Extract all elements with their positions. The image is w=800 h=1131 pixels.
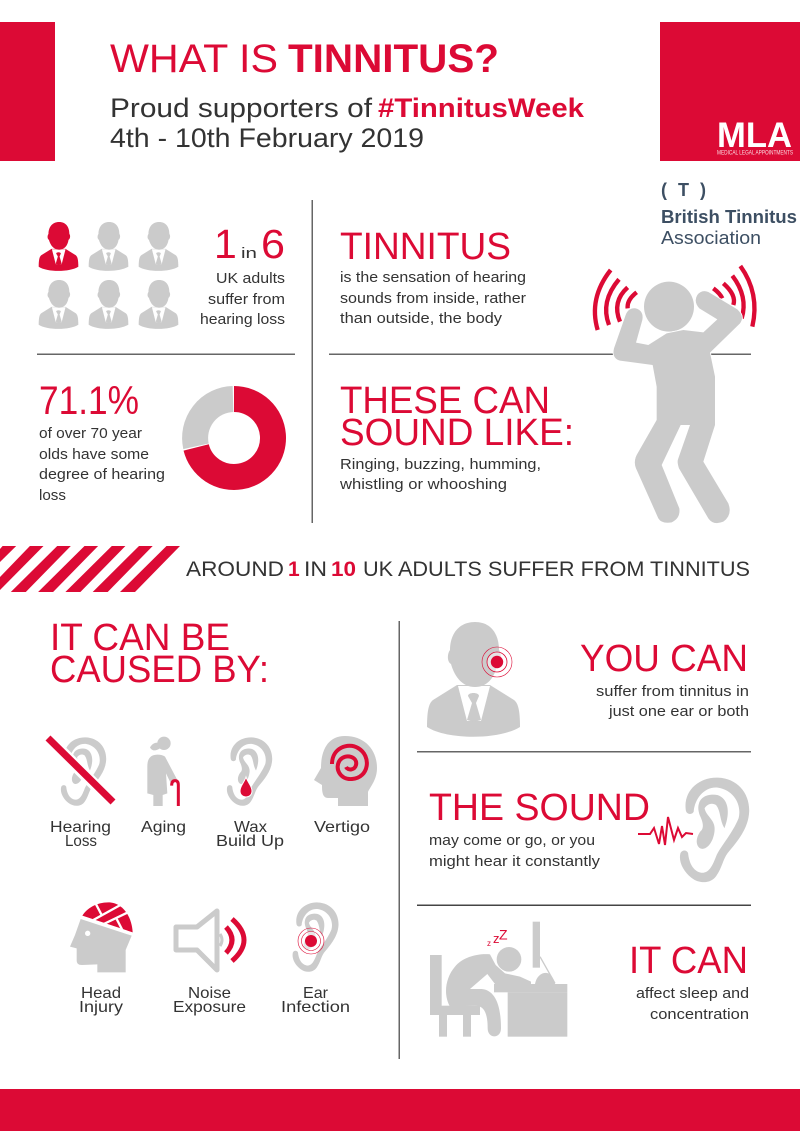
icon: person asleep at desk	[430, 922, 567, 1037]
label: aging: Aging	[141, 819, 186, 836]
header block left	[0, 22, 55, 161]
text: the sound: may come or go, or you	[429, 832, 595, 849]
subtitle: 4th - 10th February 2019	[110, 123, 424, 153]
heading: it can be caused by	[50, 617, 269, 691]
stat: 1 in 6: in	[241, 245, 257, 262]
icon: wax build up	[227, 737, 272, 806]
zzz: z	[493, 931, 500, 946]
stat: 71.1%: degree of hearing	[39, 466, 165, 483]
stat: 1 in 6	[200, 221, 285, 328]
banner text: 10	[331, 558, 356, 581]
icon: six people	[39, 222, 178, 329]
label: hearing loss: Hearing	[50, 819, 111, 836]
text: tinnitus definition: is the sensation of hearing	[340, 269, 526, 286]
text: you can	[596, 683, 749, 720]
header block right with MLA logo: MLA	[717, 116, 792, 155]
label: head injury: Injury	[79, 999, 123, 1016]
icon: hearing loss	[46, 736, 114, 806]
stat: 71.1%	[39, 379, 165, 504]
heading: it can be caused by: IT CAN BE	[50, 617, 230, 659]
banner text: 1	[288, 558, 300, 581]
label: ear infection: Ear	[303, 985, 329, 1002]
icon: ear with sound wave	[638, 778, 749, 882]
label: wax build up: Build Up	[216, 833, 284, 850]
footer bar	[0, 1089, 800, 1131]
text: the sound: might hear it constantly	[429, 853, 601, 870]
label: wax build up: Wax	[234, 819, 267, 836]
icon: ear infection	[293, 902, 339, 972]
label: ear infection: Infection	[281, 999, 350, 1016]
heading: it can: IT CAN	[629, 940, 748, 982]
label: noise exposure: Exposure	[173, 999, 246, 1016]
heading: these can sound like	[340, 380, 574, 454]
label: hearing loss: Loss	[65, 833, 97, 850]
heading: these can sound like: THESE CAN	[340, 380, 550, 422]
icon: aging	[147, 737, 178, 806]
text: it can: affect sleep and	[636, 985, 749, 1002]
title: TINNITUS?	[288, 37, 499, 81]
stat: 1 in 6: UK adults	[216, 270, 285, 287]
label: hearing loss	[50, 819, 111, 850]
stat: 71.1%: 71.1%	[39, 379, 139, 423]
heading: it can be caused by: CAUSED BY:	[50, 649, 269, 691]
dividers top	[37, 200, 751, 523]
heading: you can: YOU CAN	[580, 638, 748, 680]
label: noise exposure: Noise	[188, 985, 231, 1002]
text: you can: just one ear or both	[608, 703, 749, 720]
text: it can: concentration	[650, 1006, 749, 1023]
figure: person holding head with sound waves	[595, 266, 754, 523]
label: vertigo: Vertigo	[314, 819, 370, 836]
stat: 1 in 6: suffer from	[208, 291, 285, 308]
stat: 71.1%: of over 70 year	[39, 425, 142, 442]
heading: tinnitus: TINNITUS	[340, 226, 511, 268]
heading: these can sound like: SOUND LIKE:	[340, 412, 574, 454]
text: sounds list	[339, 456, 541, 493]
icon: head injury	[70, 902, 133, 972]
banner stripes	[0, 546, 180, 592]
British Tinnitus Association logo: ( T )	[661, 180, 706, 200]
title: WHAT IS	[110, 37, 278, 81]
text: sounds list: whistling or whooshing	[339, 476, 507, 493]
stat: 1 in 6: 1	[214, 221, 237, 267]
banner text: AROUND	[186, 558, 284, 581]
heading: the sound: THE SOUND	[429, 787, 650, 829]
zzz: z	[487, 939, 491, 948]
label: wax build up	[216, 819, 284, 850]
stat: 71.1%: loss	[39, 487, 66, 504]
banner text: UK ADULTS SUFFER FROM TINNITUS	[363, 558, 750, 581]
text: sounds list: Ringing, buzzing, humming,	[340, 456, 541, 473]
stat: 1 in 6: 6	[261, 221, 285, 267]
subtitle	[110, 93, 585, 153]
banner text: IN	[304, 558, 327, 581]
title	[110, 37, 499, 81]
label: head injury	[79, 985, 123, 1016]
text: tinnitus definition: sounds from inside, rather	[340, 290, 526, 307]
label: noise exposure	[173, 985, 246, 1016]
text: it can	[636, 985, 749, 1023]
text: tinnitus definition	[340, 269, 526, 327]
subtitle: #TinnitusWeek	[378, 93, 585, 123]
donut chart	[195, 399, 273, 477]
British Tinnitus Association logo	[661, 180, 797, 248]
icon: vertigo	[314, 736, 377, 806]
icon: noise exposure	[176, 911, 244, 970]
banner text	[186, 558, 750, 581]
stat: 71.1%: olds have some	[39, 446, 149, 463]
label: head injury: Head	[81, 985, 121, 1002]
text: the sound	[429, 832, 601, 870]
British Tinnitus Association logo: Association	[661, 227, 761, 248]
stat: 1 in 6: hearing loss	[200, 311, 285, 328]
British Tinnitus Association logo: British Tinnitus	[661, 206, 797, 227]
subtitle: Proud supporters of	[110, 93, 373, 123]
text: you can: suffer from tinnitus in	[596, 683, 749, 700]
icon: person with ear ringing	[427, 622, 520, 737]
divider centre	[398, 621, 400, 1059]
zzz: Z	[499, 926, 508, 942]
header block right with MLA logo	[660, 22, 800, 161]
text: tinnitus definition: than outside, the body	[340, 310, 503, 327]
label: ear infection	[281, 985, 350, 1016]
